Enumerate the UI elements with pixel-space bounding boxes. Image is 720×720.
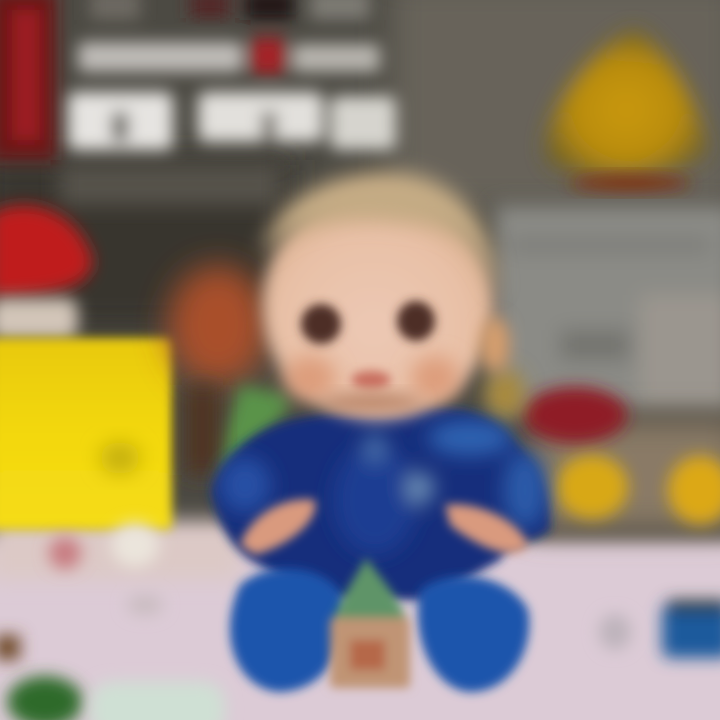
hair xyxy=(262,172,498,295)
left eye xyxy=(301,304,341,344)
yellow box xyxy=(0,338,172,530)
orange and green toy behind doll xyxy=(168,265,290,475)
doll head xyxy=(262,172,510,420)
blurred sign with white lettering xyxy=(68,0,396,150)
small items on floor left xyxy=(0,523,163,660)
mouth xyxy=(351,371,391,389)
doll hands xyxy=(240,499,528,555)
grey panel on right xyxy=(495,205,720,410)
doll body highlights xyxy=(219,420,547,555)
blue toy bottom right xyxy=(599,600,720,658)
green and white items bottom left xyxy=(7,676,225,720)
ear xyxy=(480,317,510,373)
blurred red object top left xyxy=(0,0,56,160)
doll body xyxy=(212,406,550,600)
floor xyxy=(0,420,720,720)
yellow triangular shape top right xyxy=(545,28,708,191)
cheeks xyxy=(284,356,336,400)
red and yellow toys right xyxy=(485,369,720,524)
right eye xyxy=(397,301,435,341)
red mushroom toy xyxy=(0,205,92,340)
doll legs xyxy=(230,569,529,692)
baby doll xyxy=(212,172,550,692)
small toy in lap xyxy=(330,558,410,688)
